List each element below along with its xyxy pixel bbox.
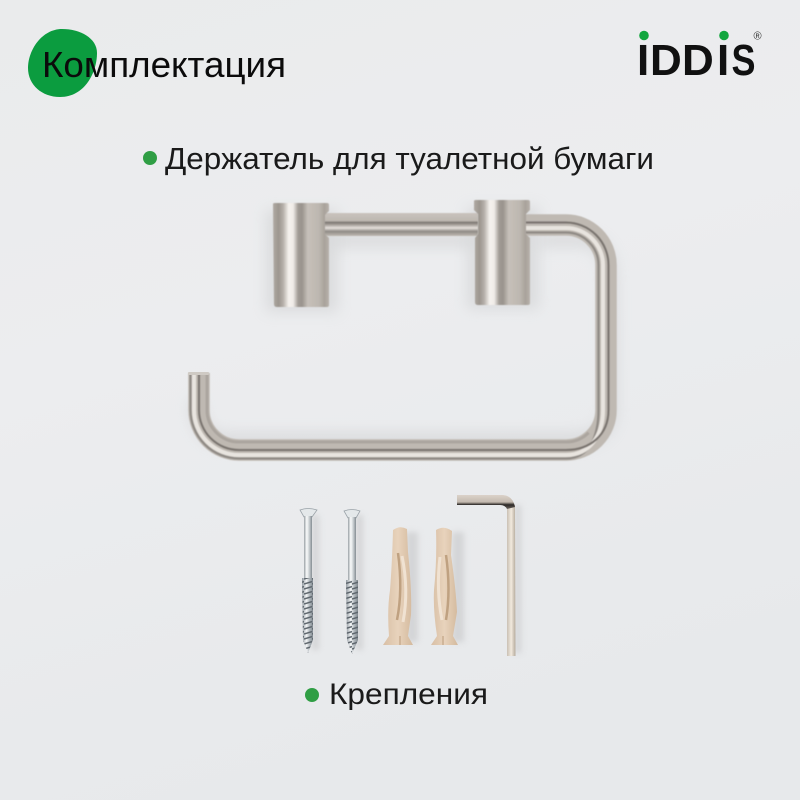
wall plug 1 [383, 527, 413, 645]
hex key [457, 495, 516, 656]
screw 2 [344, 510, 360, 654]
tube: loop arm [190, 222, 608, 458]
item label: fasteners: Крепления [329, 678, 488, 711]
screw 1 [300, 508, 317, 653]
item label: holder: Держатель для туалетной бумаги [165, 141, 654, 176]
logo: IDDIS: S [732, 36, 756, 85]
title: Комплектация [42, 44, 286, 85]
logo: IDDIS: ® [754, 30, 762, 42]
wall plug 2 [431, 528, 458, 645]
logo: IDDIS [637, 30, 762, 85]
product: toilet paper holder [188, 200, 610, 458]
left cylinder [273, 203, 329, 307]
right cylinder [474, 200, 530, 305]
tube end cap [188, 372, 209, 375]
fasteners shadows [312, 505, 521, 653]
green blob behind heading [28, 29, 97, 97]
crossbar [322, 213, 478, 236]
logo: IDDIS: IDDI [637, 36, 729, 85]
holder shadow [196, 240, 610, 440]
